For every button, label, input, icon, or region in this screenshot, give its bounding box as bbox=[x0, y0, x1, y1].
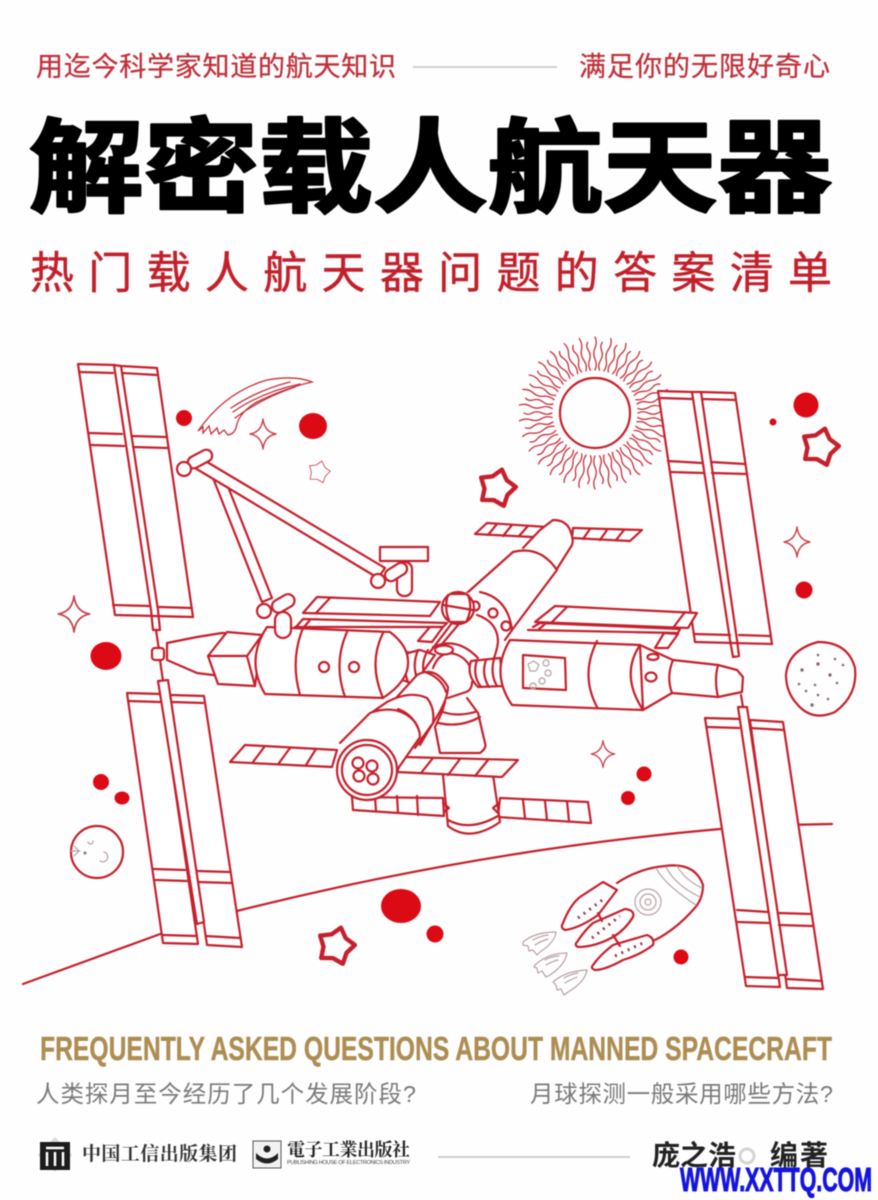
upper docking cylinder bbox=[450, 520, 573, 648]
tagline left: 用迄今科学家知道的航天知识 bbox=[36, 52, 396, 82]
publisher name 1: 中国工信出版集团 bbox=[82, 1143, 237, 1165]
robotic arm bbox=[177, 448, 428, 638]
lower right hatched wing bbox=[397, 757, 518, 777]
station solar wings upper left bbox=[295, 597, 447, 642]
solar array upper right bbox=[658, 391, 772, 657]
solar array lower left bbox=[127, 680, 242, 947]
solar array lower right bbox=[705, 695, 823, 989]
publisher name 2: 電子工業出版社 bbox=[287, 1136, 410, 1162]
left module bbox=[152, 627, 408, 698]
docking port disc bbox=[337, 740, 397, 800]
upper docking solar wing bbox=[475, 523, 642, 541]
lower left hatched wing bbox=[230, 745, 337, 767]
docking dome with portholes bbox=[470, 592, 512, 658]
bellows right bbox=[470, 658, 504, 687]
lower grid panels bbox=[352, 796, 591, 823]
right module bbox=[500, 640, 743, 710]
icon: sun bbox=[519, 337, 671, 489]
author: 编著 bbox=[770, 1140, 828, 1171]
node rosette bbox=[430, 592, 474, 652]
bottom divider bbox=[438, 1156, 630, 1158]
icon: cratered moon right bbox=[786, 642, 855, 716]
lower vertical module bbox=[443, 775, 500, 834]
core node arcs bbox=[433, 643, 478, 698]
title: 解密载人航天器 bbox=[29, 112, 832, 226]
publisher logo 1 bbox=[38, 1137, 72, 1172]
space station bbox=[152, 520, 743, 834]
stars bbox=[306, 424, 842, 966]
question right: 月球探测一般采用哪些方法? bbox=[530, 1081, 833, 1107]
neck below node bbox=[435, 698, 485, 753]
icon: small moon left bbox=[71, 826, 123, 878]
node background bbox=[400, 592, 512, 730]
tagline right: 满足你的无限好奇心 bbox=[579, 52, 830, 82]
publisher name 2: PUBLISHING HOUSE OF ELECTRONICS INDUSTRY bbox=[287, 1160, 410, 1166]
icon: rocket bbox=[523, 865, 703, 995]
sparkles bbox=[58, 419, 810, 768]
solar array upper left bbox=[78, 364, 193, 681]
horizon curve bbox=[23, 824, 832, 984]
bellows left bbox=[398, 650, 435, 684]
subtitle: 热门载人航天器问题的答案清单 bbox=[30, 249, 832, 298]
publisher logo 2 bbox=[253, 1141, 281, 1168]
station solar wings right bbox=[528, 606, 697, 648]
diagonal module bbox=[340, 672, 448, 770]
author: 庞之浩 bbox=[652, 1140, 736, 1171]
tagline divider bbox=[413, 66, 557, 68]
red dots bbox=[90, 392, 818, 964]
icon: comet bbox=[198, 378, 312, 435]
author bbox=[652, 1140, 828, 1171]
question left: 人类探月至今经历了几个发展阶段? bbox=[36, 1081, 416, 1107]
